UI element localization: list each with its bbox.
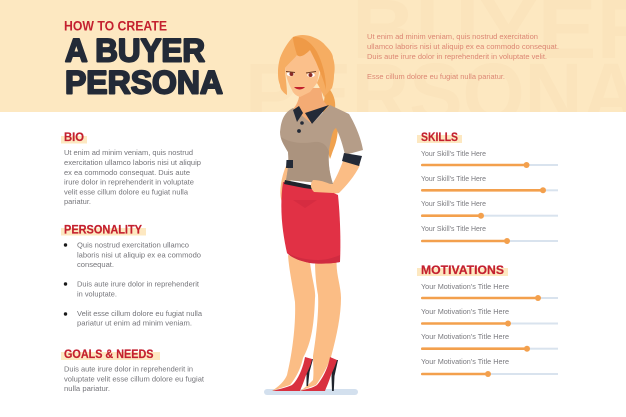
left arm bbox=[280, 166, 294, 202]
blouse shading bbox=[281, 137, 333, 184]
skill slider 3: Your Skill's Title Here bbox=[421, 201, 486, 208]
panel: motivations bbox=[417, 263, 558, 377]
neck bbox=[293, 88, 328, 124]
floor shadow bbox=[264, 389, 358, 395]
bio text: velit esse cillum dolore eu fugiat nulla bbox=[64, 188, 188, 196]
goals text: nulla pariatur. bbox=[64, 384, 110, 393]
blouse buttons bbox=[297, 121, 304, 133]
heading: goals and needs: GOALS & NEEDS bbox=[64, 347, 154, 361]
intro text bbox=[367, 32, 559, 81]
motivation slider 3 bbox=[421, 334, 558, 352]
motivation slider 3: Your Motivation's Title Here bbox=[421, 334, 509, 341]
belt bbox=[284, 180, 326, 191]
bio text: Ut enim ad minim veniam, quis nostrud bbox=[64, 148, 193, 157]
lips bbox=[294, 87, 305, 89]
title: HOW TO CREATE bbox=[64, 18, 167, 34]
right arm bbox=[311, 158, 360, 194]
skill slider 4 bbox=[421, 226, 558, 244]
intro text: Ut enim ad minim veniam, quis nostrud exercitation bbox=[367, 32, 538, 41]
motivation slider 4: Your Motivation's Title Here bbox=[421, 359, 509, 366]
panel: skills bbox=[417, 130, 558, 244]
title bbox=[64, 18, 223, 100]
skill slider 1: Your Skill's Title Here bbox=[421, 151, 486, 158]
bullet list: Quis nostrud exercitation ullamco bbox=[77, 240, 189, 250]
bullet list: in voluptate. bbox=[77, 290, 117, 298]
panel: goals and needs bbox=[61, 347, 204, 393]
collar bbox=[293, 105, 329, 124]
goals text: voluptate velit esse cillum dolore eu fugiat bbox=[64, 374, 204, 384]
bio text bbox=[64, 148, 201, 206]
header banner bbox=[0, 0, 626, 140]
bullet list: Velit esse cillum dolore eu fugiat nulla bbox=[77, 309, 202, 318]
intro text: Esse cillum dolore eu fugiat nulla pariatur. bbox=[367, 72, 505, 81]
panel: bio bbox=[61, 130, 201, 206]
skill slider 4: Your Skill's Title Here bbox=[421, 226, 486, 233]
hair fringe bbox=[293, 37, 326, 90]
bio text: exercitation ullamco laboris nisi ut aliquip bbox=[64, 158, 201, 167]
motivation slider 2 bbox=[421, 309, 558, 326]
heading: personality: PERSONALITY bbox=[64, 222, 142, 236]
hair bbox=[278, 35, 335, 97]
bullet list bbox=[64, 240, 202, 328]
ponytail bbox=[323, 85, 338, 159]
eyes bbox=[286, 72, 316, 77]
motivation slider 2: Your Motivation's Title Here bbox=[421, 309, 509, 316]
sleeve cuffs bbox=[286, 153, 362, 168]
skill slider 2 bbox=[421, 176, 558, 193]
panel: personality bbox=[61, 222, 202, 328]
illustration: woman bbox=[264, 35, 363, 395]
heading: bio: BIO bbox=[64, 130, 84, 144]
goals text bbox=[64, 364, 204, 393]
hand bbox=[311, 180, 335, 193]
blouse bbox=[280, 105, 363, 184]
intro text: Duis aute irure dolor in reprehenderit in voluptate velit. bbox=[367, 52, 547, 61]
motivation slider 1 bbox=[421, 284, 558, 301]
legs bbox=[272, 255, 341, 391]
bullet list: consequat. bbox=[77, 260, 114, 269]
skill slider 1 bbox=[421, 151, 558, 168]
bio text: pariatur. bbox=[64, 197, 91, 206]
bullet list: laboris nisi ut aliquip ex ea commodo bbox=[77, 250, 201, 260]
heading: skills: SKILLS bbox=[421, 130, 458, 144]
heading: motivations: MOTIVATIONS bbox=[421, 263, 504, 277]
bio text: ex ea commodo consequat. Duis aute bbox=[64, 168, 190, 177]
skill slider 3 bbox=[421, 201, 558, 219]
skirt shading bbox=[287, 200, 340, 264]
title: PERSONA bbox=[65, 64, 223, 100]
motivation slider 1: Your Motivation's Title Here bbox=[421, 284, 509, 291]
motivation slider 4 bbox=[421, 359, 558, 377]
goals text: Duis aute irure dolor in reprehenderit in bbox=[64, 364, 193, 374]
bio text: irure dolor in reprehenderit in voluptate bbox=[64, 178, 194, 186]
skirt bbox=[281, 182, 340, 264]
red high heels bbox=[272, 357, 338, 391]
face bbox=[285, 50, 320, 97]
title: A BUYER bbox=[65, 32, 205, 68]
skill slider 2: Your Skill's Title Here bbox=[421, 176, 486, 183]
intro text: ullamco laboris nisi ut aliquip ex ea commodo consequat. bbox=[367, 42, 559, 51]
bullet list: Duis aute irure dolor in reprehenderit bbox=[77, 280, 199, 288]
bullet list: pariatur ut enim ad minim veniam. bbox=[77, 318, 192, 328]
